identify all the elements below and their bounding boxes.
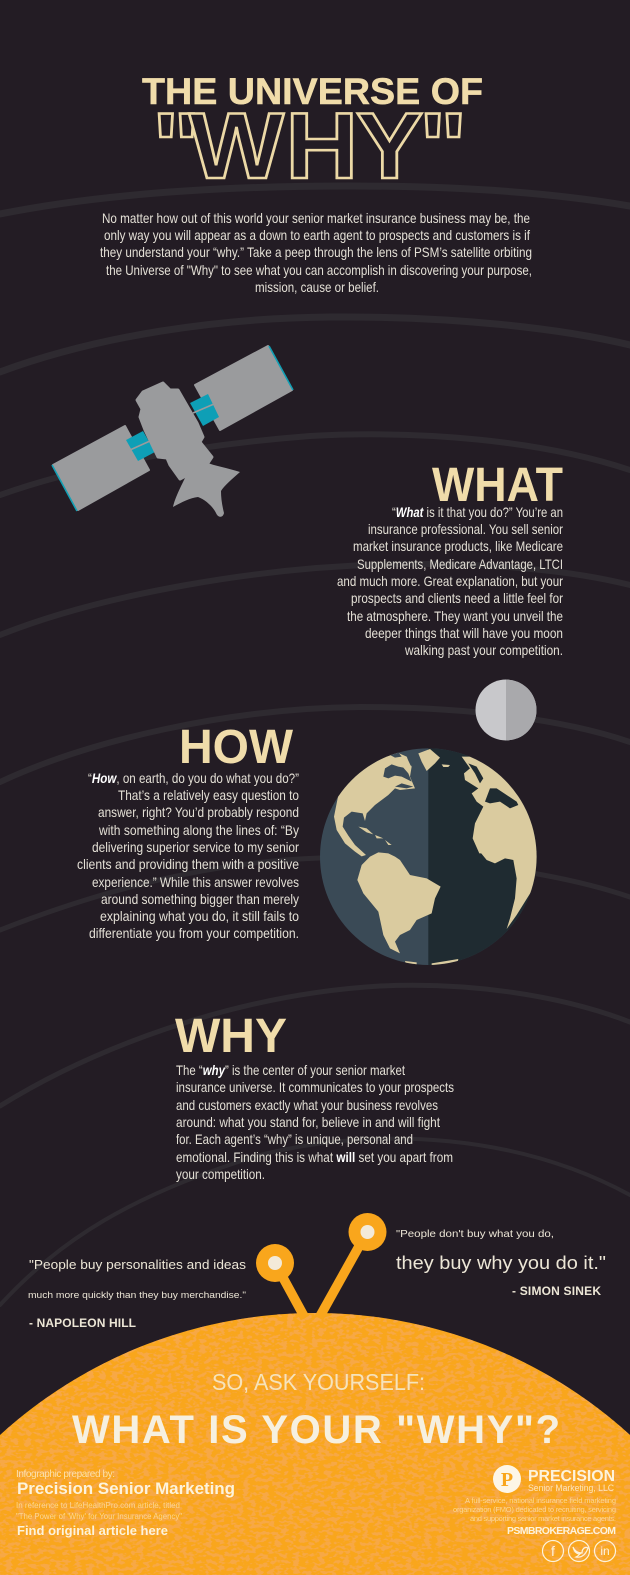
icon: planet antennae <box>256 1213 386 1318</box>
text block: how: clients and providing them with a positive <box>77 856 299 872</box>
quote: napoleon hill: much more quickly than they buy merchandise." <box>28 1290 246 1301</box>
footer: website: PSMBROKERAGE.COM <box>507 1525 616 1537</box>
footer: credits: Precision Senior Marketing <box>17 1479 235 1498</box>
text block: what: “What is it that you do?” You’re an <box>392 504 563 520</box>
text block: how: answer, right? You’d probably respond <box>98 804 299 820</box>
footer: company description: organization (FMO) dedicated to recruiting, servicing <box>453 1505 616 1514</box>
icon: satellite <box>52 346 293 517</box>
text block: what <box>337 504 563 658</box>
text block: how: “How, on earth, do you do what you do?” <box>88 770 299 786</box>
footer: credits: In reference to LifeHealthPro.com article, titled <box>16 1500 180 1510</box>
orange planet <box>0 1300 630 1575</box>
footer: credits: Infographic prepared by: <box>16 1469 115 1480</box>
footer: social icons <box>542 1540 616 1562</box>
text block: why: The “why” is the center of your senior market <box>176 1062 405 1078</box>
quote: simon sinek <box>396 1228 606 1298</box>
title: "WHY" <box>152 93 467 198</box>
call to action: SO, ASK YOURSELF: <box>212 1369 425 1395</box>
footer: company description: A full-service, national insurance field marketing <box>465 1496 616 1505</box>
heading: why: WHY <box>175 1010 287 1063</box>
text block: what: walking past your competition. <box>404 642 563 658</box>
quote: simon sinek: "People don't buy what you do, <box>396 1228 554 1240</box>
text block: how: That’s a relatively easy question to <box>118 787 299 803</box>
text block: why: around: what you stand for, believe in and will fight <box>176 1114 440 1130</box>
text block: why <box>176 1062 454 1182</box>
footer: credits <box>16 1469 235 1538</box>
quote: napoleon hill <box>28 1257 247 1330</box>
text block: how: around something bigger than merely <box>101 891 299 907</box>
text block: what: insurance professional. You sell senior <box>368 521 563 537</box>
footer: company description <box>453 1496 616 1523</box>
footer: company description: and supporting senior market insurance agents. <box>470 1514 616 1523</box>
heading: how: HOW <box>179 721 294 774</box>
quote: napoleon hill: - NAPOLEON HILL <box>29 1316 136 1330</box>
text block: what: prospects and clients need a little feel for <box>351 590 563 606</box>
footer: company logo: Senior Marketing, LLC <box>528 1483 614 1494</box>
panel: why <box>175 1010 454 1182</box>
text block: how: with something along the lines of: “By <box>98 822 299 838</box>
text block: how: explaining what you do, it still fails to <box>100 908 299 924</box>
quote: simon sinek: - SIMON SINEK <box>512 1284 601 1298</box>
text block: why: and customers exactly what your business revolves <box>176 1097 438 1113</box>
icon: earth <box>320 748 547 967</box>
footer: company logo: P <box>501 1469 513 1491</box>
text block: how: delivering superior service to my senior <box>92 839 299 855</box>
icon: moon <box>476 680 536 740</box>
heading: what: WHAT <box>432 459 563 512</box>
panel: what <box>337 459 563 658</box>
text block: why: emotional. Finding this is what will set you apart from <box>176 1149 453 1165</box>
intro text block: No matter how out of this world your senior market insurance business may be, the <box>102 210 530 226</box>
text block: what: market insurance products, like Medicare <box>353 538 563 554</box>
intro text block: mission, cause or belief. <box>255 279 379 295</box>
call to action: WHAT IS YOUR "WHY"? <box>72 1408 560 1452</box>
text block: how: differentiate you from your competition. <box>89 925 299 941</box>
quote: napoleon hill: "People buy personalities and ideas <box>29 1257 247 1272</box>
intro text block: they understand your “why.” Take a peep through the lens of PSM’s satellite orbiting <box>100 244 532 260</box>
intro text block: only way you will appear as a down to earth agent to prospects and customers is if <box>104 227 530 243</box>
quote: simon sinek: they buy why you do it." <box>396 1253 606 1273</box>
text block: why: insurance universe. It communicates to your prospects <box>176 1079 454 1095</box>
panel: how <box>77 721 299 941</box>
footer: credits: "The Power of 'Why' for Your Insurance Agency" <box>16 1511 182 1521</box>
text block: why: your competition. <box>176 1166 265 1182</box>
text block: what: the atmosphere. They want you unveil the <box>347 608 563 624</box>
intro text block <box>100 210 532 295</box>
text block: what: Supplements, Medicare Advantage, LTCI <box>357 556 563 572</box>
text block: what: and much more. Great explanation, but your <box>337 573 563 589</box>
footer: social icons: in <box>600 1544 610 1558</box>
text block: why: for. Each agent’s “why” is unique, personal and <box>176 1131 413 1147</box>
title: THE UNIVERSE OF <box>142 71 483 112</box>
call to action <box>72 1369 560 1452</box>
text block: what: deeper things that will have you moon <box>365 625 563 641</box>
intro text block: the Universe of "Why" to see what you can accomplish in discovering your purpose, <box>106 262 532 278</box>
text block: how <box>77 770 299 941</box>
footer: company logo <box>493 1465 615 1494</box>
footer: credits: Find original article here <box>17 1523 168 1538</box>
text block: how: experience.” While this answer revolves <box>92 874 299 890</box>
footer: company logo: PRECISION <box>528 1468 615 1485</box>
footer: social icons: f <box>551 1543 555 1559</box>
